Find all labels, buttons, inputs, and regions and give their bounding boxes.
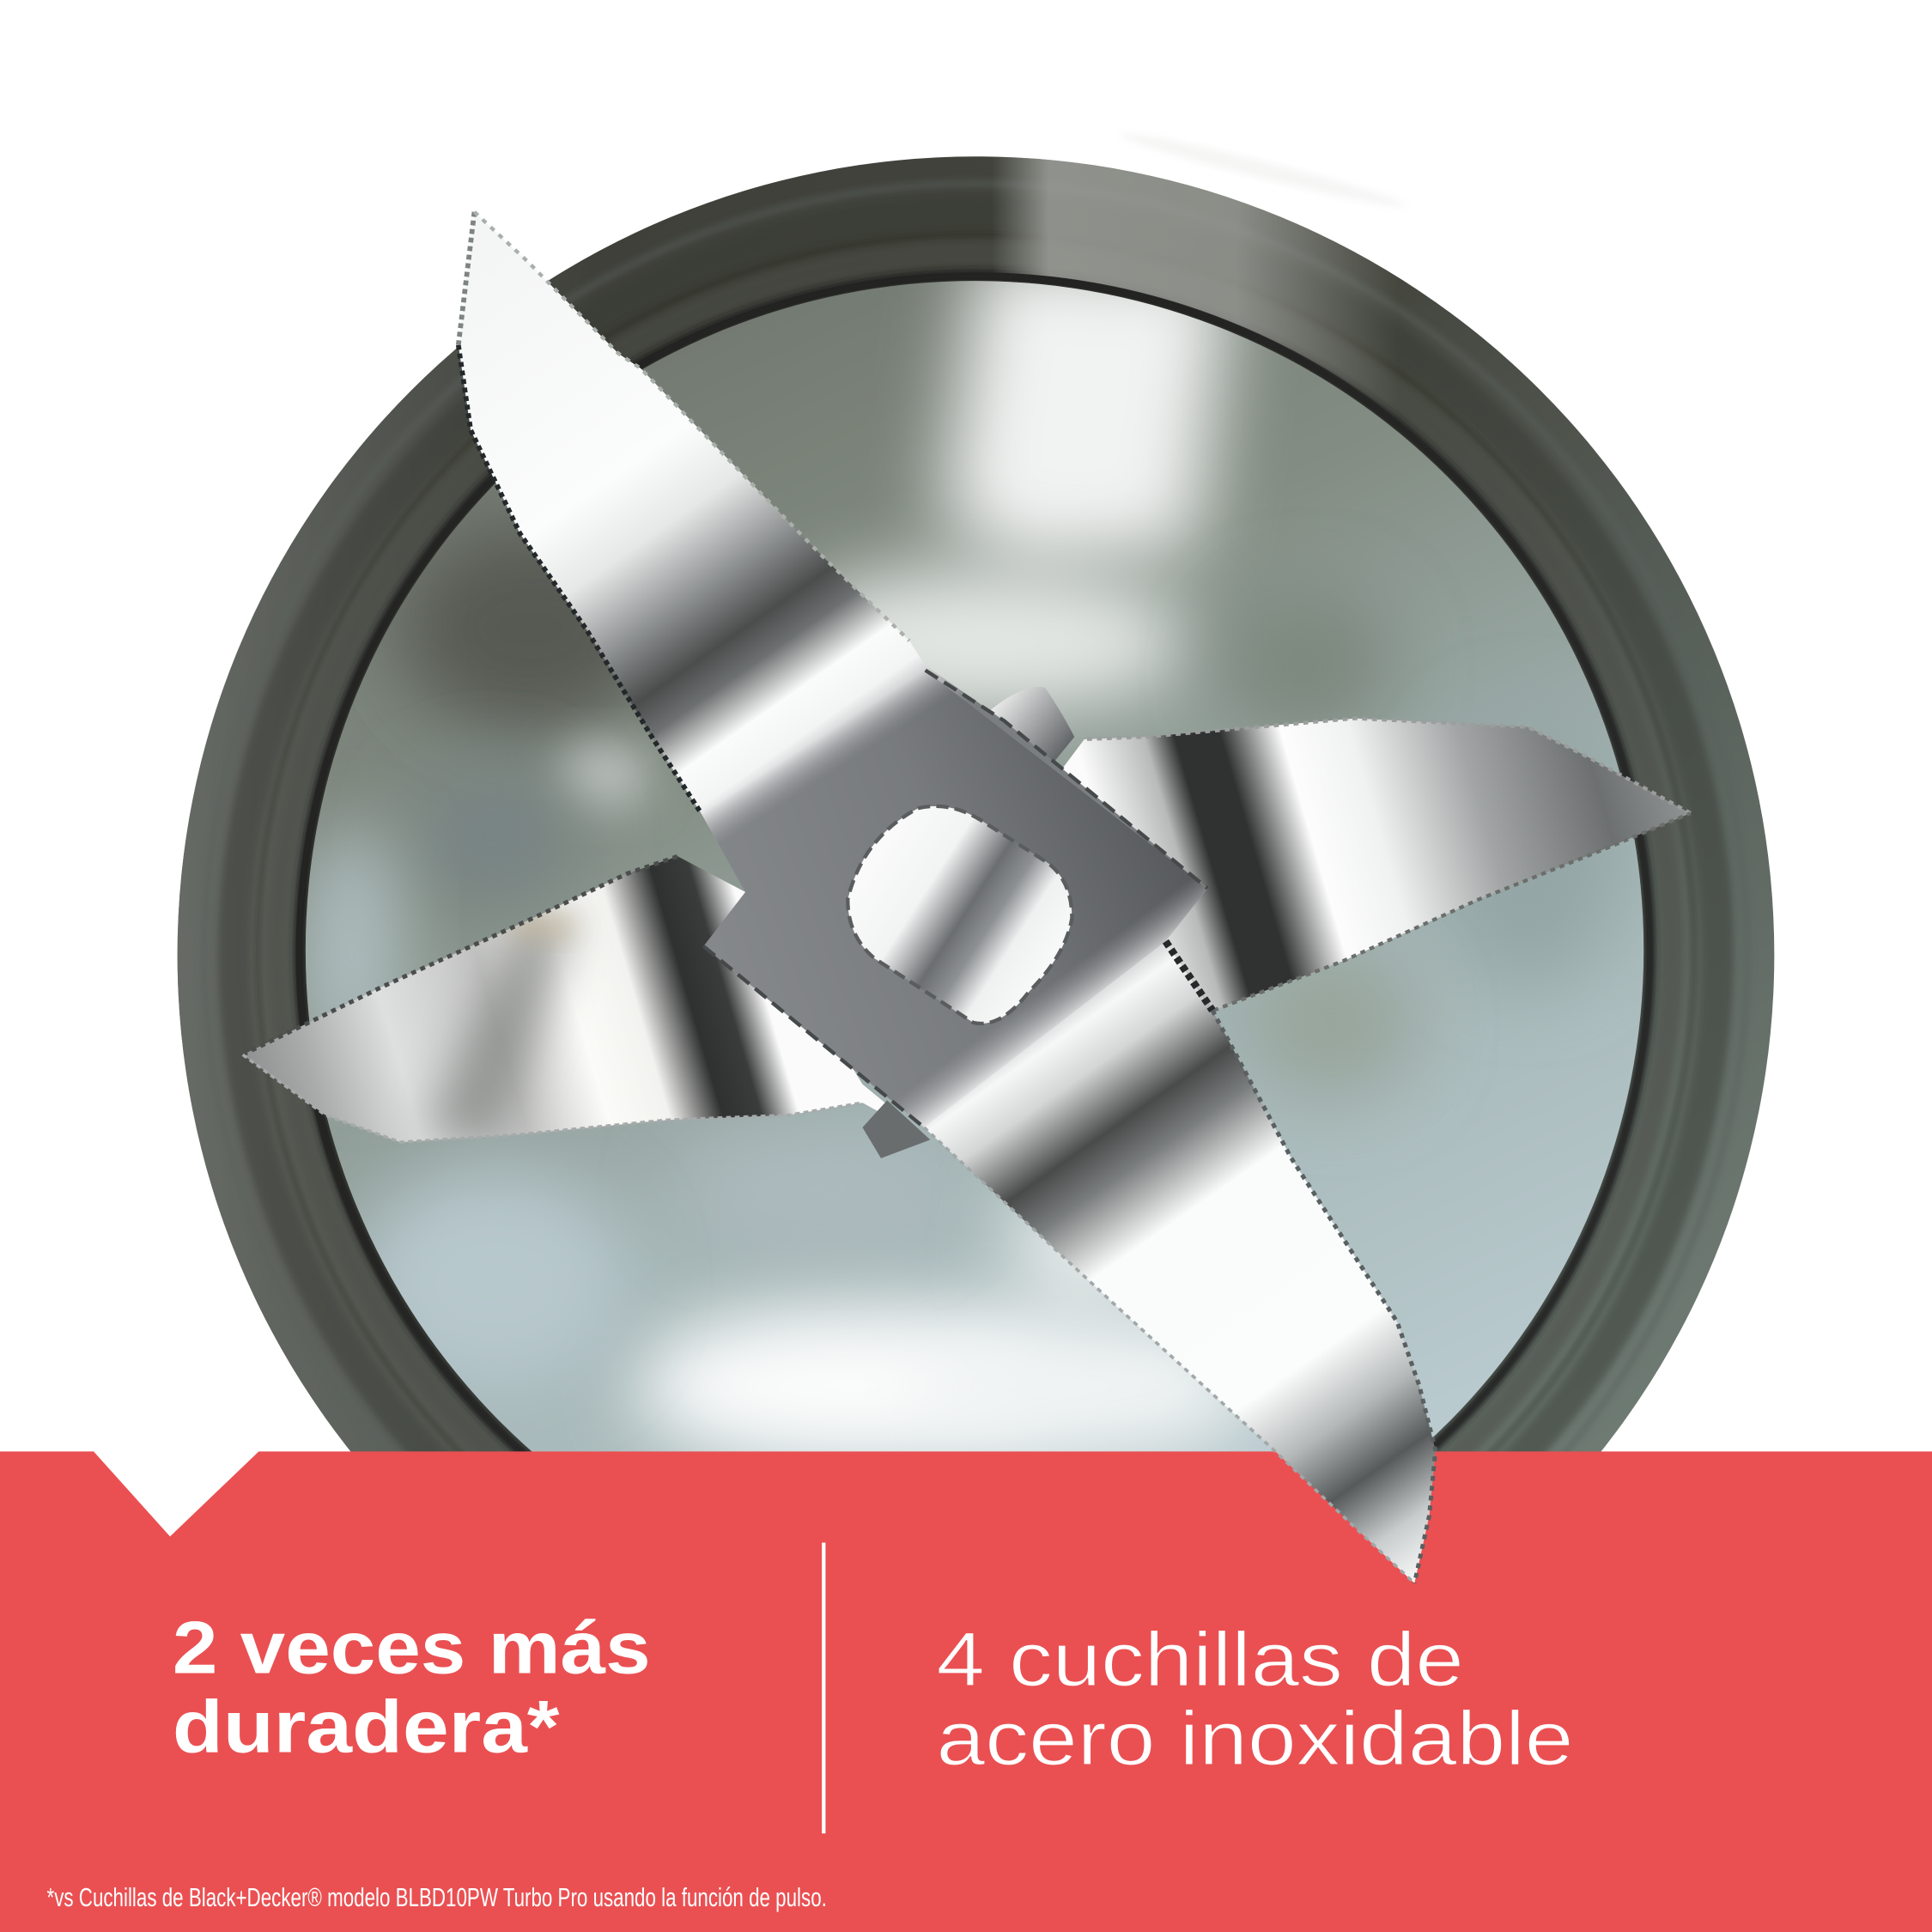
mounting tab: bottom [862, 1100, 930, 1158]
plate edge lines [703, 671, 1207, 1127]
divider [822, 1543, 825, 1833]
central mounting plate [701, 671, 1207, 1127]
blade: left [243, 856, 930, 1146]
heading: stainless steel blades: acero inoxidable [937, 1695, 1573, 1781]
center hole [848, 806, 1072, 1024]
steel blade assembly [243, 212, 1691, 1583]
heading: stainless steel blades: 4 cuchillas de [937, 1616, 1464, 1702]
heading: durability claim: duradera* [173, 1686, 560, 1768]
faint glare streak above the cup [1117, 126, 1408, 214]
blade: right [1048, 719, 1691, 1011]
blender cup base [177, 156, 1774, 1451]
inner stainless disc [306, 281, 1643, 1451]
heading: stainless steel blades [937, 1616, 1573, 1781]
red caption band with notch [0, 1451, 1932, 1932]
mounting tab: top [989, 687, 1074, 770]
footnote: *vs Cuchillas de Black+Decker® modelo BLBD10PW Turbo Pro usando la función de pulso. [47, 1884, 827, 1912]
blade: long diagonal pair [459, 212, 1436, 1583]
heading: durability claim: 2 veces más [173, 1607, 651, 1690]
outer gasket ring [178, 156, 1774, 1753]
heading: durability claim [173, 1607, 651, 1768]
